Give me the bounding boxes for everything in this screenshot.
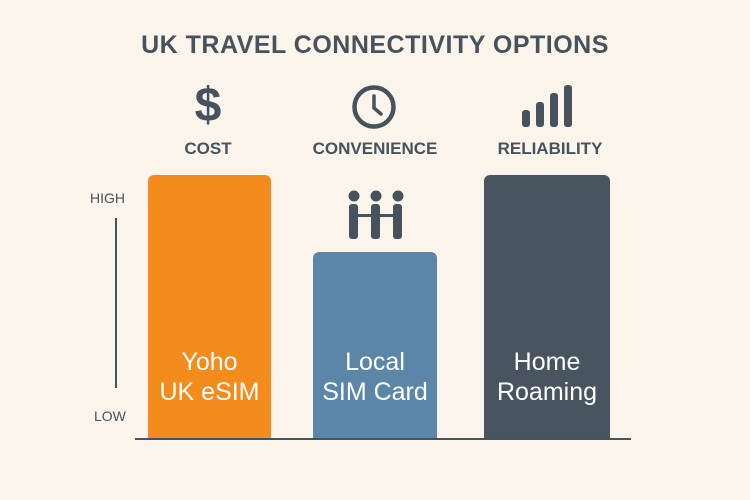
bar: Local SIM: SIM Card (322, 378, 428, 406)
title: UK TRAVEL CONNECTIVITY OPTIONS (141, 31, 609, 59)
label: reliability: RELIABILITY (498, 139, 602, 158)
bar: Local SIM (313, 252, 437, 438)
icon: dollar: $ (195, 79, 221, 132)
axis: LOW (94, 408, 126, 424)
label: cost: COST (184, 139, 232, 158)
icon: people (348, 190, 404, 239)
baseline (135, 438, 631, 440)
icon: signal bars (522, 85, 572, 127)
bar: Home Roaming (484, 175, 610, 438)
axis: HIGH (90, 190, 125, 206)
bar: Yoho (148, 175, 271, 438)
icon: clock (352, 85, 396, 129)
bar: Home Roaming: Roaming (497, 378, 597, 406)
label: convenience: CONVENIENCE (313, 139, 437, 158)
bar: Yoho: Yoho (181, 348, 238, 376)
bar: Local SIM: Local (345, 348, 405, 376)
axis (90, 190, 126, 424)
bar: Home Roaming: Home (514, 348, 580, 376)
bar: Yoho: UK eSIM (159, 378, 260, 406)
